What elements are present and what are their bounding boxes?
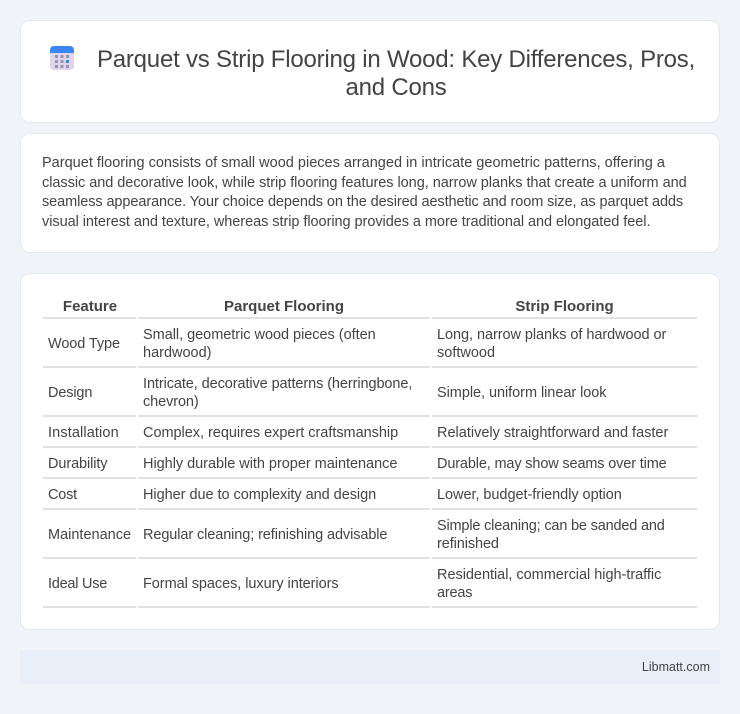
header: Feature: Feature [63,298,117,315]
row: Durability: Durability [48,456,107,472]
header: Parquet Flooring: Parquet Flooring [224,298,344,315]
title: Parquet vs Strip Flooring in Wood: Key Differences, Pros, [97,46,695,73]
row: Ideal Use: Ideal Use [48,576,107,592]
comparison table: Small, geometric wood pieces (often [143,327,376,343]
comparison table: Formal spaces, luxury interiors [143,576,339,592]
row: Installation: Installation [48,425,119,441]
comparison table: Simple cleaning; can be sanded and [437,518,665,534]
panel: title card [20,20,720,123]
comparison table: Highly durable with proper maintenance [143,456,397,472]
comparison table: areas [437,585,472,601]
comparison table: Complex, requires expert craftsmanship [143,425,398,441]
comparison table: Lower, budget-friendly option [437,487,622,503]
intro paragraph: visual interest and texture, whereas strip flooring provides a more traditional and elongated feel. [42,214,650,230]
footer text: Libmatt.com [642,660,710,674]
panel: intro text [20,133,720,253]
icon: calendar [50,46,74,70]
comparison table: Relatively straightforward and faster [437,425,668,441]
comparison table: Durable, may show seams over time [437,456,667,472]
row: Design: Design [48,385,92,401]
comparison table: chevron) [143,394,199,410]
comparison table: hardwood) [143,345,212,361]
row: Maintenance: Maintenance [48,527,131,543]
intro paragraph: seamless appearance. Your choice depends on the desired aesthetic and room size, as parquet adds [42,194,683,210]
panel: comparison table [20,273,720,630]
comparison table: refinished [437,536,499,552]
comparison table: Residential, commercial high-traffic [437,567,661,583]
intro paragraph: classic and decorative look, while strip flooring features long, narrow planks that create a uniform and [42,174,687,190]
footer bar [20,650,720,684]
row: Wood Type: Wood Type [48,336,120,352]
comparison table: Higher due to complexity and design [143,487,376,503]
title: and Cons [345,74,447,101]
title [97,46,695,101]
intro paragraph [42,155,687,230]
comparison table: softwood [437,345,495,361]
comparison table: Long, narrow planks of hardwood or [437,327,666,343]
comparison table: Intricate, decorative patterns (herringbone, [143,376,412,392]
intro paragraph: Parquet flooring consists of small wood pieces arranged in intricate geometric patterns, offering a [42,155,665,171]
row: Cost: Cost [48,487,77,503]
header: Strip Flooring: Strip Flooring [515,298,614,315]
comparison table: Simple, uniform linear look [437,385,606,401]
comparison table: Regular cleaning; refinishing advisable [143,527,387,543]
